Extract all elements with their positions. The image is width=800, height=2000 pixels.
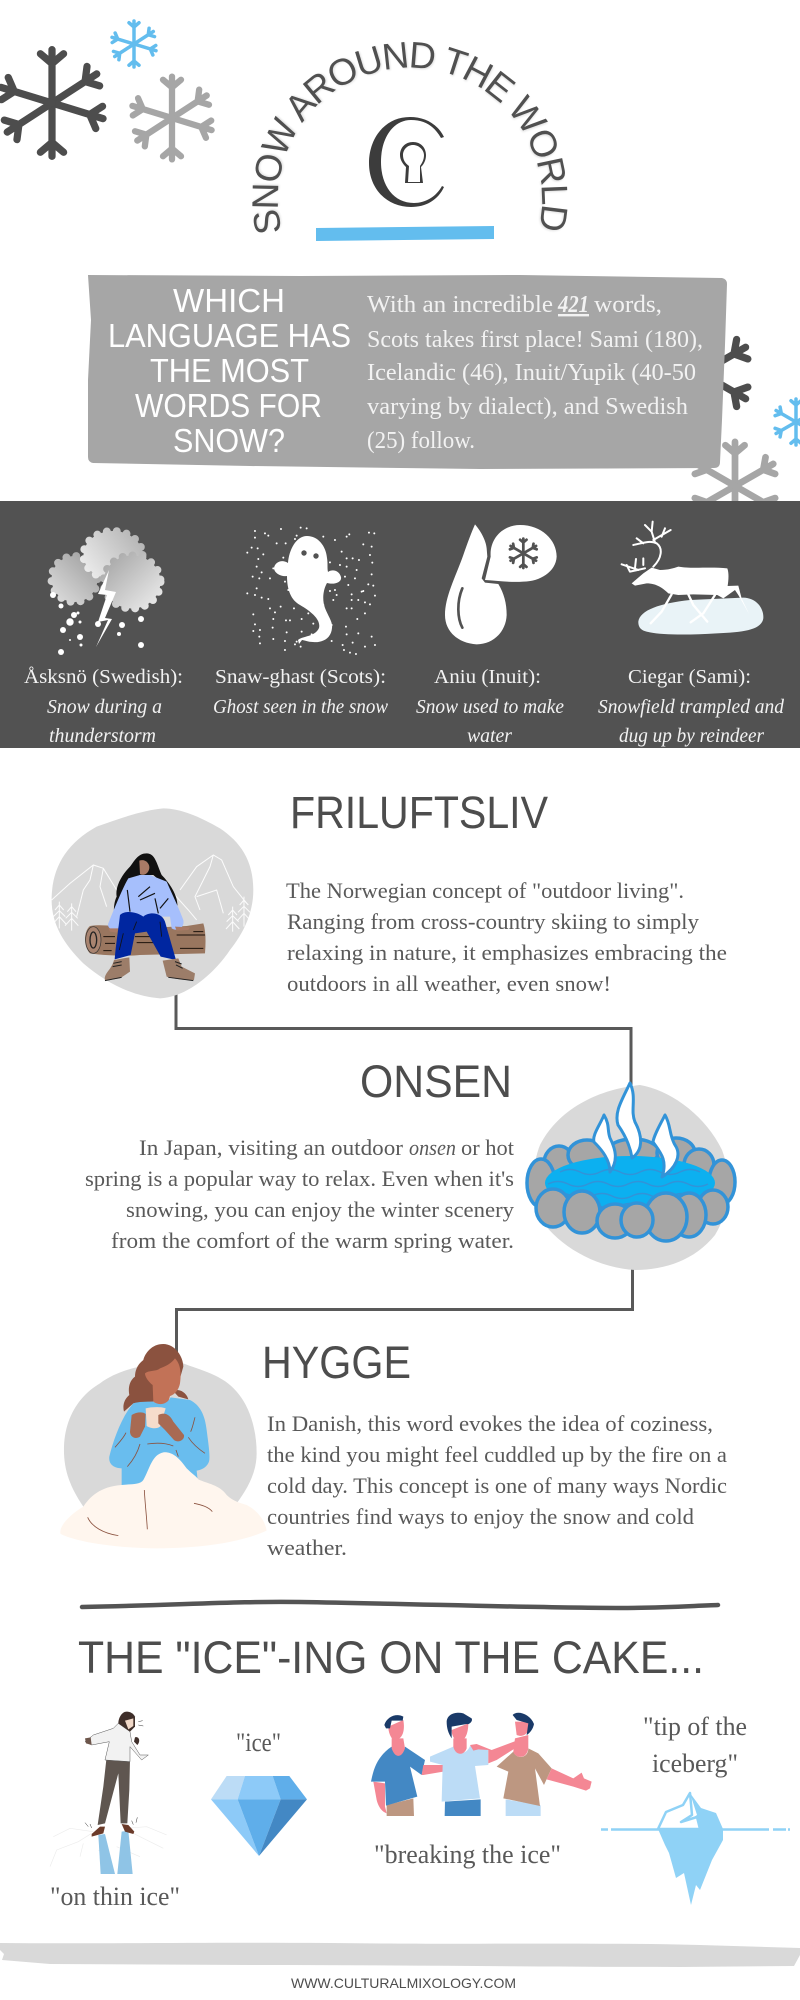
illustration: three friends breaking the ice <box>371 1713 592 1816</box>
text block: hygge <box>267 1411 727 1560</box>
text block: friluftsliv: outdoors in all weather, even snow! <box>287 971 611 996</box>
icon: right blue snowflake <box>774 399 800 445</box>
blue underline bar <box>316 226 494 241</box>
text block: onsen <box>85 1135 515 1253</box>
caption: Aniu: Aniu (Inuit): <box>434 666 541 688</box>
caption: tip of the iceberg: "tip of the <box>643 1712 747 1741</box>
heading: friluftsliv: FRILUFTSLIV <box>290 787 548 838</box>
text block: language word counts: Scots takes first place! Sami (180), <box>367 327 703 353</box>
caption: ice: "ice" <box>236 1728 281 1757</box>
caption: tip of the iceberg <box>643 1712 747 1778</box>
caption: breaking the ice: "breaking the ice" <box>374 1840 561 1869</box>
panel: which language has the most words for snow <box>88 275 727 469</box>
footer: website: WWW.CULTURALMIXOLOGY.COM <box>291 1975 516 1991</box>
text block: friluftsliv: Ranging from cross-country skiing to simply <box>287 909 700 934</box>
heading: the ice-ing on the cake: THE "ICE"-ING ON THE CAKE... <box>78 1632 704 1683</box>
caption: Asksno: thunderstorm <box>49 725 156 747</box>
heading: hygge: HYGGE <box>262 1337 411 1388</box>
icon: grey snowflake <box>130 77 214 159</box>
text block: hygge: In Danish, this word evokes the idea of coziness, <box>267 1411 713 1436</box>
caption: Asksno: Åsksnö (Swedish): <box>24 666 183 688</box>
caption: Snaw-ghast: Snaw-ghast (Scots): <box>215 666 386 688</box>
text block: language word counts <box>367 292 703 454</box>
icon: large dark snowflake <box>0 50 106 156</box>
heading: which language <box>108 282 351 459</box>
icon: diamond <box>211 1776 307 1856</box>
caption: Ciegar <box>598 666 785 747</box>
caption: Ciegar: Snowfield trampled and <box>598 696 785 718</box>
text block: hygge: countries find ways to enjoy the snow and cold <box>267 1504 694 1529</box>
caption: Ciegar: dug up by reindeer <box>619 725 764 747</box>
icon: reindeer on trampled snowfield <box>622 522 763 634</box>
text block: language word counts: Icelandic (46), Inuit/Yupik (40-50 <box>367 360 696 386</box>
text block: friluftsliv: The Norwegian concept of "outdoor living". <box>286 878 684 903</box>
caption: Snaw-ghast <box>213 666 389 718</box>
person: left friend <box>371 1715 443 1816</box>
icon: snow ghost <box>247 528 375 654</box>
text block: hygge: weather. <box>267 1535 347 1560</box>
connector line: onsen to hygge <box>176 1265 632 1360</box>
footer band <box>0 1943 800 1967</box>
text block: onsen: spring is a popular way to relax. Even when it's <box>85 1166 514 1191</box>
logo: C with keyhole <box>369 117 444 207</box>
icon: small blue snowflake <box>111 21 157 67</box>
text block: hygge: cold day. This concept is one of many ways Nordic <box>267 1473 727 1498</box>
caption: Asksno <box>24 666 183 747</box>
illustration: person on thin ice <box>50 1712 167 1874</box>
icon: right grey snowflake <box>692 442 778 530</box>
text block: onsen: or hot <box>461 1135 515 1160</box>
text block: language word counts: With an incredible <box>367 292 553 318</box>
heading: which language: WHICH <box>173 282 285 319</box>
person: middle friend <box>430 1713 488 1816</box>
text block: language word counts: (25) follow. <box>367 428 475 454</box>
caption: Snaw-ghast: Ghost seen in the snow <box>213 696 389 718</box>
text block: onsen: from the comfort of the warm spring water. <box>111 1228 514 1253</box>
heading: which language: SNOW? <box>173 422 285 459</box>
title: snow around the world: SNOW AROUND THE WORLD <box>252 42 568 232</box>
text block: onsen: In Japan, visiting an outdoor <box>139 1135 404 1160</box>
text block: friluftsliv: relaxing in nature, it emphasizes embracing the <box>287 940 727 965</box>
icon: water drop with snowflake bubble <box>445 524 557 644</box>
connector line: friluftsliv to onsen <box>176 990 631 1090</box>
heading: which language: LANGUAGE HAS <box>108 317 351 354</box>
panel: snow words band <box>0 501 800 748</box>
text block: hygge: the kind you might feel cuddled up by the fire on a <box>267 1442 727 1467</box>
text block: friluftsliv <box>286 878 727 996</box>
icon: thundersnow cloud <box>50 531 160 655</box>
illustration: hygge woman with mug and blanket <box>60 1344 267 1548</box>
person: right friend <box>470 1713 592 1816</box>
heading: which language: WORDS FOR <box>135 387 322 424</box>
caption: Aniu: Snow used to make <box>416 696 564 718</box>
heading: onsen: ONSEN <box>360 1056 512 1107</box>
illustration: friluftsliv person on log <box>52 808 253 998</box>
caption: Aniu <box>416 666 564 747</box>
heading: which language: THE MOST <box>150 352 309 389</box>
caption: Asksno: Snow during a <box>47 696 162 718</box>
text block: language word counts: 421 <box>557 292 589 318</box>
text block: onsen: onsen <box>409 1135 456 1160</box>
text block: onsen: snowing, you can enjoy the winter scenery <box>126 1197 515 1222</box>
caption: on thin ice: "on thin ice" <box>50 1882 180 1911</box>
caption: tip of the iceberg: iceberg" <box>652 1749 738 1778</box>
icon: iceberg <box>601 1793 790 1905</box>
illustration: onsen hot spring <box>527 1083 735 1270</box>
caption: Aniu: water <box>467 725 512 747</box>
text block: language word counts: words, <box>594 292 662 318</box>
text block: language word counts: varying by dialect), and Swedish <box>367 394 688 420</box>
icon: right dark snowflake <box>651 321 751 425</box>
caption: Ciegar: Ciegar (Sami): <box>628 666 751 688</box>
